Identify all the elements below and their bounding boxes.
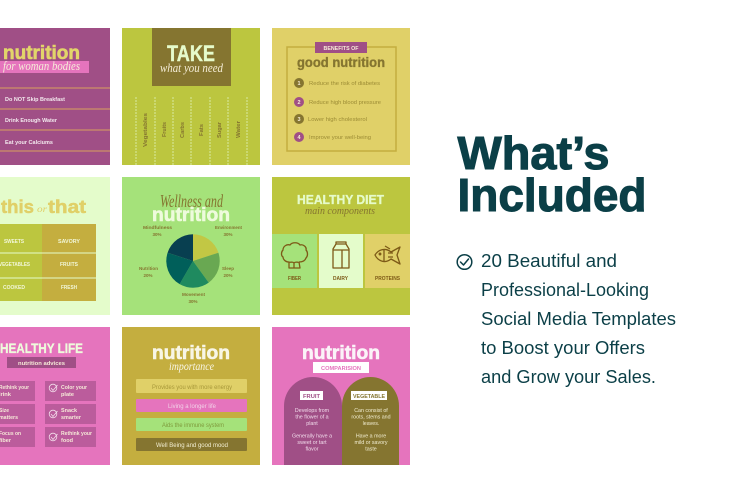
panel: nutrition importance (122, 327, 260, 465)
tear-off labels: Fruits (162, 122, 168, 137)
description text: 20 Beautiful and (481, 251, 617, 271)
arch: fruit: plant (306, 421, 318, 427)
title: what's included: What’s (458, 127, 610, 179)
description text: Professional-Looking (481, 280, 649, 300)
arch: fruit: Develops from (295, 408, 330, 414)
tear-off labels: Vegetables (143, 113, 149, 147)
title: what's included: Included (458, 169, 646, 221)
advice cards: plate (61, 392, 74, 398)
importance bars: Living a longer life (168, 404, 217, 410)
icon: broccoli (282, 243, 308, 268)
numbered benefits: 4 (297, 135, 301, 141)
pie labels: Nutrition (139, 266, 158, 271)
category labels (288, 276, 401, 282)
arch: fruit: the flower of a (295, 414, 329, 420)
icon: check circle (457, 255, 472, 269)
arch: fruit: flavor (306, 446, 319, 452)
tip list: Eat your Calciums (5, 140, 53, 146)
heading: this or that: that (48, 197, 86, 217)
comparison table: SAVORY (58, 239, 81, 245)
arch: vegetable (342, 377, 399, 465)
description text: to Boost your Offers (481, 338, 645, 358)
heading: nutrition: nutrition (152, 205, 230, 226)
pie chart (166, 234, 220, 288)
numbered benefits: Lower high cholesterol (308, 117, 367, 123)
heading: healthy life: HEALTHY LIFE (0, 341, 83, 356)
category labels: FIBER (288, 276, 301, 282)
script subtitle: for woman bodies (3, 58, 80, 73)
script subtitle: main components (305, 205, 375, 217)
numbered benefits: Reduce high blood pressure (309, 100, 381, 106)
panel: wellness and nutrition (122, 177, 260, 315)
advice cards (0, 381, 96, 447)
pie labels: Mindfulness (143, 225, 173, 230)
comparison table: FRUITS (60, 262, 79, 268)
arch: vegetable: Have a more (356, 434, 386, 440)
tear-off labels: Fats (199, 124, 205, 136)
importance bars: Aids the immune system (162, 423, 224, 429)
advice cards: smarter (61, 415, 81, 421)
numbered benefits (294, 78, 381, 142)
heading: this or that: this (1, 197, 34, 217)
pie labels: Sleep (222, 266, 234, 271)
numbered benefits: Reduce the risk of diabetes (309, 81, 380, 87)
numbered benefits: 3 (297, 117, 301, 123)
pie labels: 20% (143, 273, 153, 278)
pie labels (139, 225, 242, 304)
panel: healthy diet (272, 177, 410, 315)
numbered benefits: 1 (297, 81, 301, 87)
heading: healthy diet: HEALTHY DIET (297, 193, 384, 207)
arch: vegetable: Can consist of (354, 408, 388, 414)
importance bars (136, 379, 247, 451)
heading: nutrition: nutrition (152, 343, 230, 364)
heading: nutrition: nutrition (302, 343, 380, 364)
description text: Social Media Templates (481, 309, 676, 329)
comparison table: FRESH (61, 285, 77, 291)
description text: and Grow your Sales. (481, 367, 656, 387)
arch: vegetable: roots, stems and (351, 414, 391, 420)
heading: TAKE: TAKE (167, 41, 215, 66)
arch: vegetable: taste (365, 446, 377, 452)
tip list (5, 97, 65, 146)
arch: vegetable: leaves. (363, 421, 379, 427)
comparison table (0, 224, 96, 301)
label: comparision: COMPARISION (321, 366, 361, 372)
heading: good nutrition: good nutrition (297, 55, 385, 70)
script subtitle: what you need (160, 60, 223, 75)
script subtitle: importance (169, 359, 215, 373)
icon: milk carton (333, 242, 349, 268)
numbered benefits: 2 (297, 100, 301, 106)
pie labels: 30% (188, 299, 198, 304)
arch: fruit: sweet or tart (297, 440, 327, 446)
tear-off labels: Sugar (217, 121, 223, 138)
importance bars: Provides you with more energy (152, 385, 232, 391)
tip list: Do NOT Skip Breakfast (5, 97, 65, 103)
script heading: Wellness and (160, 191, 224, 211)
icon: fish (375, 246, 400, 264)
panel: nutrition comparision (272, 327, 410, 465)
pie labels: 30% (152, 232, 162, 237)
arch: fruit: FRUIT (303, 394, 321, 400)
comparison table: COOKED (3, 285, 25, 291)
arch: fruit: Generally have a (292, 434, 332, 440)
advice cards: Snack (61, 408, 77, 414)
heading: this or that: or (37, 204, 48, 214)
advice cards: Rethink your (61, 431, 92, 437)
panel: take what you need (122, 28, 260, 165)
numbered benefits: Improve your well-being (309, 135, 371, 141)
pie labels: Movement (182, 292, 206, 297)
category labels: PROTEINS (375, 276, 401, 282)
importance bars: Well Being and good mood (156, 443, 228, 449)
tear-off labels (143, 113, 242, 147)
arch: vegetable: VEGETABLE (353, 394, 385, 400)
arch: fruit (284, 377, 342, 465)
label: nutrition advices: nutrition advices (18, 361, 65, 367)
comparison table: VEGETABLES (0, 262, 31, 268)
tear-off labels: Carbs (180, 122, 186, 138)
panel: benefits of good nutrition (272, 28, 410, 165)
panel: healthy life (0, 327, 110, 465)
heading: nutrition: nutrition (3, 43, 80, 64)
label: benefits of: BENEFITS OF (324, 46, 359, 52)
pie labels: Environment (215, 225, 242, 230)
panel: nutrition for woman bodies (0, 28, 110, 165)
advice cards: food (61, 438, 73, 444)
description text (481, 251, 676, 387)
category labels: DAIRY (333, 276, 349, 282)
comparison table: SWEETS (4, 239, 25, 245)
tear-off labels: Water (236, 120, 242, 138)
arch: vegetable: mild or savory (355, 440, 388, 446)
panel: this or that (0, 177, 110, 315)
pie labels: 20% (223, 273, 233, 278)
heading: this or that (1, 197, 86, 217)
pie labels: 30% (223, 232, 233, 237)
title: what's included (458, 127, 646, 221)
advice cards: Color your (61, 385, 87, 391)
tip list: Drink Enough Water (5, 118, 58, 124)
